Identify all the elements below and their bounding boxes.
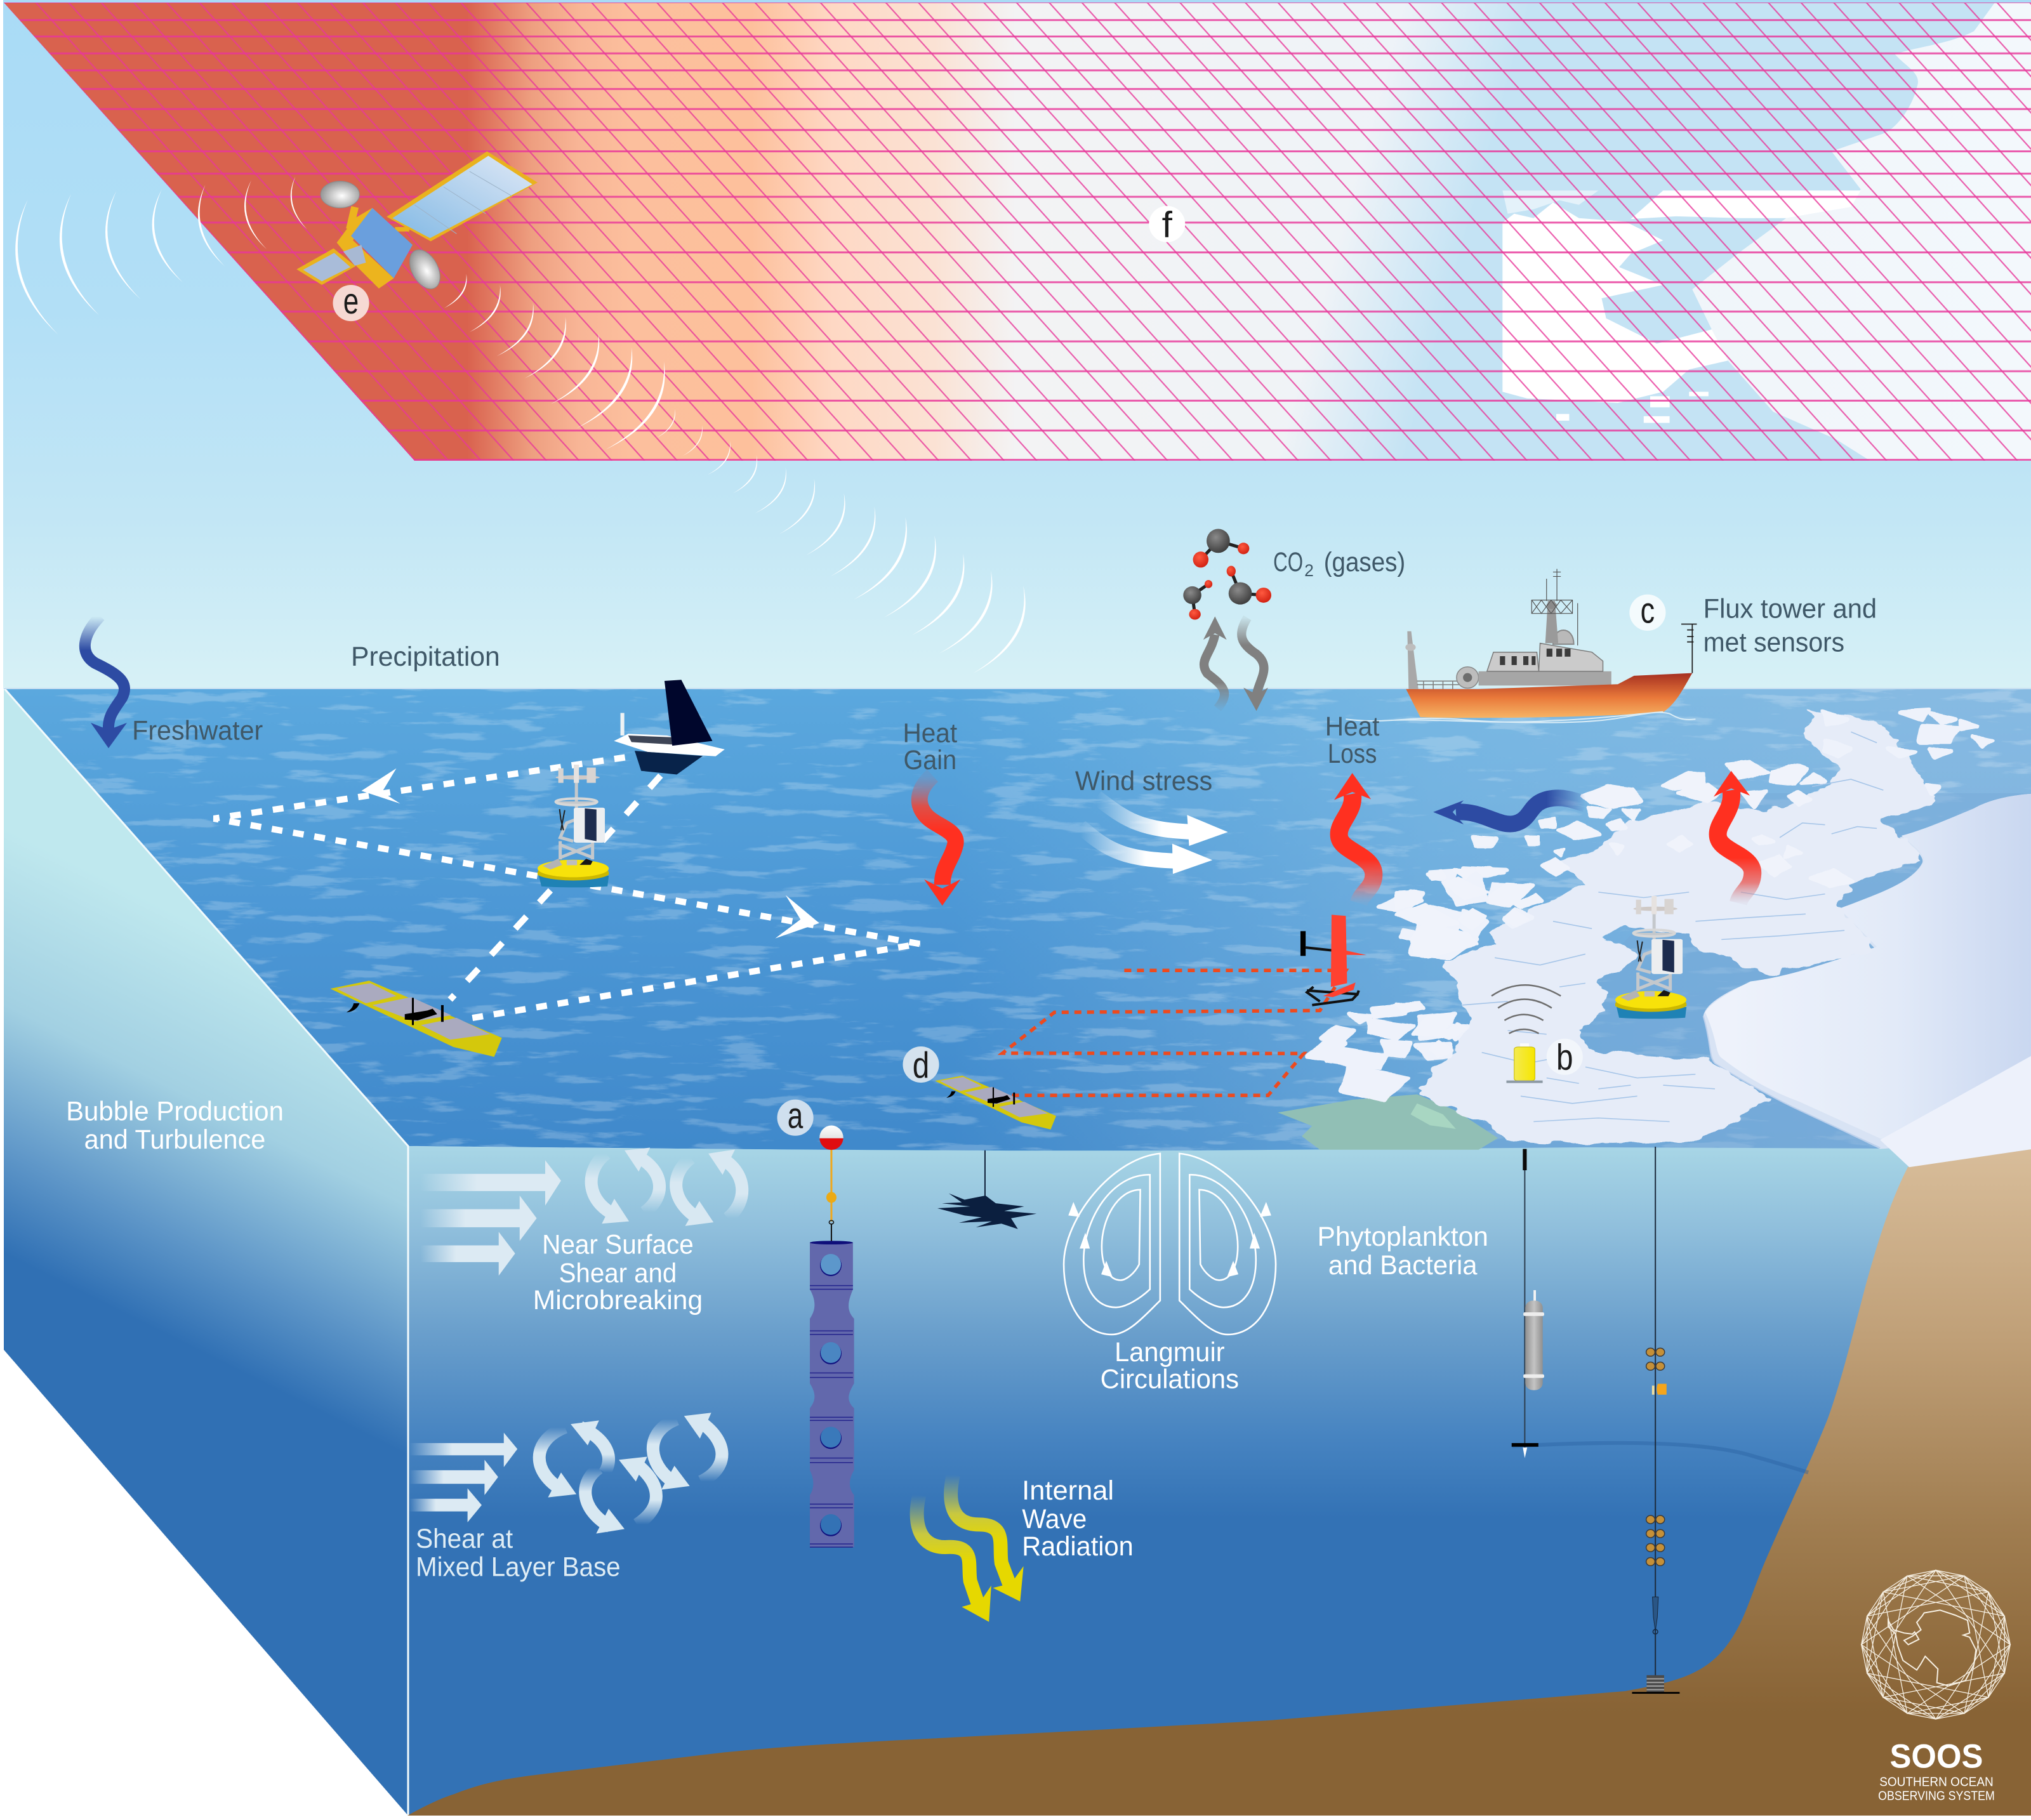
- label: co2 gases: CO: [1273, 547, 1303, 577]
- label: heat loss: [1325, 711, 1380, 769]
- icon: satellite: [296, 152, 538, 291]
- panel f: satellite data grid: [0, 0, 2031, 463]
- label: co2 gases: (gases): [1324, 547, 1405, 577]
- near surface shear arrows: [421, 1160, 561, 1276]
- wave glider left: [330, 980, 502, 1057]
- icon: meteorological buoy left: [538, 765, 609, 887]
- SOOS logo globe: [1862, 1570, 2010, 1719]
- marker b: [1547, 1038, 1583, 1078]
- label: heat gain: Gain: [903, 745, 956, 775]
- label: heat gain: [903, 718, 957, 775]
- label: langmuir circulations: [1101, 1337, 1239, 1395]
- marker f: [1149, 204, 1185, 245]
- icon: meteorological buoy on ice: [1615, 896, 1686, 1019]
- anchor: [1632, 1675, 1679, 1694]
- text labels on ocean surface: [132, 547, 1877, 796]
- drift ice floes: [1307, 710, 1992, 1100]
- label: internal wave radiation: Radiation: [1022, 1531, 1134, 1562]
- waves: right swath: [444, 274, 1026, 673]
- label: freshwater: Freshwater: [132, 715, 263, 746]
- label: flux tower: Flux tower and: [1704, 593, 1877, 624]
- horizontal grid lines: [0, 3, 2031, 460]
- label: co2 gases: 2: [1304, 561, 1314, 580]
- white dashed survey pattern: [214, 758, 920, 1019]
- label: near surface shear: Microbreaking: [533, 1285, 703, 1316]
- marker b: b: [1556, 1038, 1573, 1078]
- panel: left side face: [4, 688, 408, 1816]
- label: internal wave radiation: Wave: [1022, 1504, 1087, 1534]
- label: langmuir circulations: Langmuir: [1115, 1337, 1225, 1368]
- sea ice blue field on satellite map: [1302, 3, 1994, 461]
- left cell: [1064, 1154, 1160, 1335]
- label: langmuir circulations: Circulations: [1101, 1364, 1239, 1395]
- label: internal wave radiation: [1022, 1475, 1134, 1562]
- marker a: [777, 1096, 814, 1137]
- right cell: [1179, 1154, 1276, 1335]
- panel: ocean surface: [0, 688, 2031, 1164]
- label: flux tower: met sensors: [1704, 628, 1844, 658]
- marker c: c: [1641, 591, 1655, 631]
- arrows: co2 flux: [1203, 616, 1268, 711]
- label: heat loss: Heat: [1325, 711, 1380, 742]
- under ice glider mooring: [1512, 1149, 1544, 1458]
- label: heat loss: Loss: [1328, 739, 1377, 769]
- label: bubble production: and Turbulence: [84, 1124, 265, 1155]
- shelf face shadow: [1704, 1016, 1880, 1148]
- co2 molecules: [1183, 529, 1271, 619]
- marker d: d: [913, 1045, 929, 1086]
- SOOS wordmark: OBSERVING SYSTEM: [1878, 1790, 1995, 1804]
- marker d: [903, 1045, 939, 1086]
- label: wind stress: Wind stress: [1075, 766, 1212, 796]
- ice cracks: [1462, 732, 1883, 1122]
- arrow: brine and freshwater from ice: [1433, 798, 1585, 824]
- diagonal grid lines: [0, 0, 2031, 461]
- label: heat gain: Heat: [903, 718, 957, 748]
- label: co2 gases: [1273, 547, 1405, 580]
- microbreaking circulation arrows: [592, 1147, 742, 1226]
- panel: seabed and continental slope: [407, 1149, 2031, 1816]
- marker e: e: [343, 281, 359, 322]
- fast ice sheet: [1417, 712, 1935, 1144]
- label: bubble production: Bubble Production: [66, 1096, 284, 1126]
- marker c: [1629, 591, 1665, 631]
- label: precipitation: Precipitation: [351, 642, 500, 672]
- arrowhead left: [361, 768, 400, 803]
- instrument: [1652, 1384, 1667, 1395]
- label: near surface shear: [533, 1229, 703, 1316]
- icon: flux tower sensors: [1681, 624, 1697, 673]
- marker e: [333, 281, 369, 322]
- label: shear at mixed layer base: [416, 1524, 621, 1583]
- icon: yellow ice tethered beacon: [1492, 985, 1561, 1083]
- langmuir circulation loops: [1064, 1154, 1276, 1335]
- label: flux tower: [1704, 593, 1877, 658]
- arrow: heat loss ice: [1714, 771, 1752, 903]
- arrows: wind stress: [1080, 798, 1228, 874]
- panel: sky background: [3, 0, 2031, 689]
- panel: ice shelf: [1704, 794, 2031, 1167]
- arrow: heat loss ocean: [1334, 773, 1373, 903]
- label: phytoplankton: [1317, 1222, 1488, 1281]
- drift ice floes upper channel: [1396, 762, 1853, 1057]
- label: phytoplankton: Phytoplankton: [1317, 1222, 1488, 1252]
- acoustic release: [1653, 1597, 1658, 1634]
- arrows: internal wave radiation: [917, 1475, 1024, 1622]
- SOOS wordmark: [1878, 1738, 1995, 1804]
- red autonomous surface vehicle: [1300, 914, 1366, 1005]
- label: near surface shear: Near Surface: [542, 1229, 694, 1260]
- label: internal wave radiation: Internal: [1022, 1475, 1114, 1506]
- SOOS wordmark: SOUTHERN OCEAN: [1879, 1775, 1994, 1789]
- ship with flux tower: [1405, 569, 1697, 718]
- mixed layer shear arrows: [409, 1433, 517, 1522]
- arrowhead right: [775, 895, 819, 939]
- SOOS wordmark: SOOS: [1890, 1738, 1983, 1776]
- label: shear at mixed layer base: Shear at: [416, 1524, 513, 1554]
- mixed layer base circulation arrows: [539, 1413, 722, 1534]
- profiling float and tube mooring: [810, 1126, 854, 1547]
- red dashed survey pattern: [1003, 970, 1346, 1095]
- panel: front water column: [408, 1146, 1910, 1816]
- label: bubble production: [66, 1096, 284, 1155]
- waves: left swath: [15, 176, 307, 335]
- ship wake: [1346, 712, 1695, 723]
- marker f: f: [1162, 204, 1172, 245]
- glider submerged wings: [937, 1151, 1036, 1229]
- satellite swath waves: [15, 176, 1026, 673]
- label: shear at mixed layer base: Mixed Layer Base: [416, 1552, 621, 1583]
- wave glider right: [935, 1076, 1056, 1130]
- phytoplankton bloom patch: [1278, 1094, 1498, 1150]
- panel: sea ice field: [1278, 710, 1992, 1150]
- deep mooring with flotation and anchor: [1632, 1147, 1679, 1694]
- arrow: freshwater: [85, 616, 127, 748]
- flotation spheres lower: [1646, 1515, 1665, 1566]
- flotation spheres upper: [1646, 1348, 1665, 1370]
- marker a: a: [788, 1096, 803, 1137]
- uncrewed sailing vehicle: [614, 680, 725, 774]
- label: near surface shear: Shear and: [559, 1258, 677, 1288]
- label: phytoplankton: and Bacteria: [1328, 1250, 1478, 1281]
- horizon line: [4, 688, 2031, 689]
- white ice patches on satellite map: [1502, 190, 1861, 423]
- arrow: heat gain: [920, 775, 960, 906]
- thermocline wave line: [1512, 1443, 1808, 1472]
